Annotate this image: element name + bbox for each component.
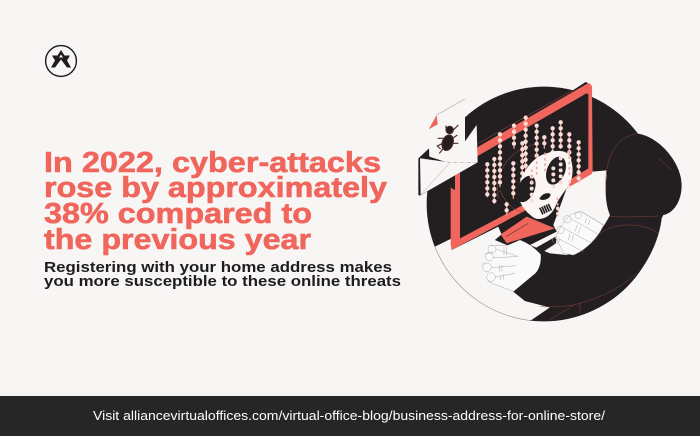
monitor frame: [451, 83, 593, 250]
code rain behind skull: [487, 118, 579, 215]
monitor back strip: [473, 82, 587, 147]
keyboard: [495, 212, 557, 252]
thin red lines on screen: [478, 90, 573, 213]
right hand: [553, 211, 603, 255]
footer bar: [0, 396, 700, 436]
heading: [44, 147, 387, 256]
subheading text: Registering with your home address makes: [44, 259, 392, 276]
icon: envelope with spider letter: [418, 99, 478, 196]
envelope front: [420, 125, 478, 195]
hood and sleeve seam lines: [540, 134, 672, 320]
heading: the previous year: [44, 224, 311, 256]
icon: company logo: [46, 46, 76, 76]
left hand: [482, 240, 541, 292]
envelope back: [418, 122, 478, 196]
spider: [437, 125, 458, 153]
monitor screen: [460, 94, 588, 238]
skull: [513, 151, 573, 219]
monitor left dark shading: [451, 175, 455, 190]
thin disc outline lower left: [435, 247, 532, 321]
subheading text: you more susceptible to these online threats: [44, 273, 401, 290]
footer url text: Visit alliancevirtualoffices.com/virtual-office-blog/business-address-for-online-store/: [93, 408, 605, 423]
illustration: hacker at computer: [418, 82, 682, 327]
hooded figure and arm: [513, 133, 682, 321]
heading: In 2022, cyber-attacks: [44, 147, 381, 179]
code rain over skull: [532, 152, 569, 218]
letter: [428, 99, 465, 163]
subheading text: [44, 259, 401, 290]
heading: rose by approximately: [44, 172, 387, 204]
black circular backdrop with light cutouts: [426, 86, 648, 322]
heading: 38% compared to: [44, 198, 312, 230]
